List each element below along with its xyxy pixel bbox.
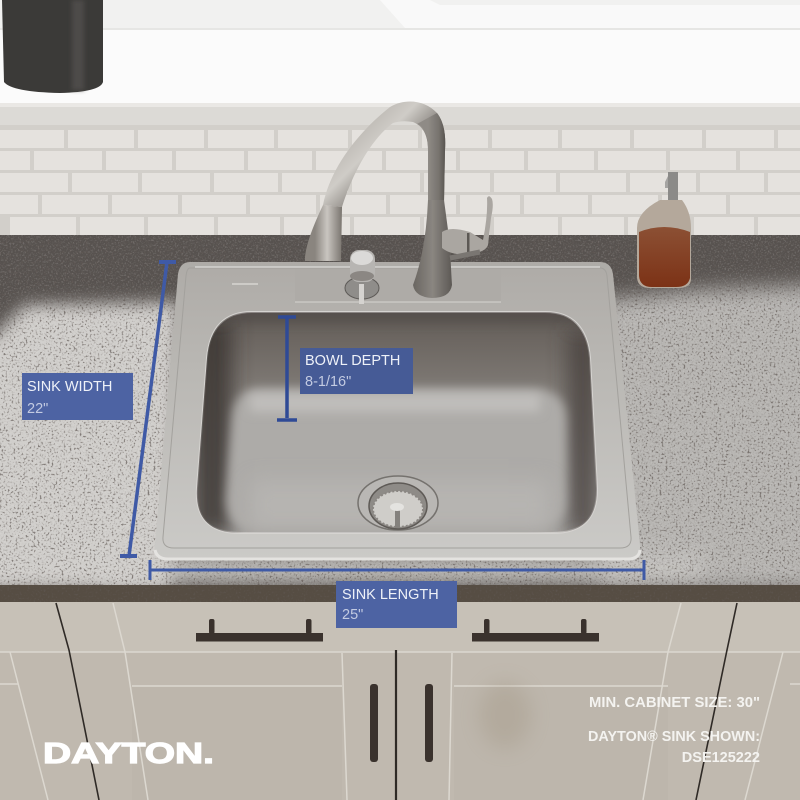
cabinet size note <box>588 695 760 766</box>
faucet body <box>413 200 452 298</box>
spout arc <box>323 101 445 207</box>
lever handle <box>442 196 493 254</box>
label: sink length: 25" <box>342 607 363 623</box>
cabinet size note: DAYTON® SINK SHOWN: <box>588 729 760 745</box>
label: bowl depth: BOWL DEPTH <box>305 353 400 369</box>
soap bottle <box>637 172 691 288</box>
faucet neck shading <box>417 113 445 202</box>
label: sink length <box>336 581 457 628</box>
cabinet size note: MIN. CABINET SIZE: 30" <box>589 695 760 711</box>
window sill background <box>0 0 800 104</box>
dimension: sink length <box>150 560 644 628</box>
width measure line <box>120 262 176 556</box>
plant pot <box>2 0 103 93</box>
sink bowl <box>197 312 597 533</box>
door handle left <box>370 684 378 762</box>
faucet deck plate <box>295 269 501 302</box>
length measure line <box>150 560 644 580</box>
drawer pull right <box>472 619 599 642</box>
granite countertop <box>0 235 800 603</box>
drawer pull left <box>196 619 323 642</box>
label: bowl depth: 8-1/16" <box>305 374 351 390</box>
depth measure line <box>277 317 297 420</box>
brand mark on rim <box>232 283 258 285</box>
label: sink width <box>22 373 133 420</box>
label: sink width: SINK WIDTH <box>27 379 112 395</box>
sink rim <box>155 262 640 559</box>
dimension: bowl depth <box>277 317 413 420</box>
stainless sink <box>155 262 640 559</box>
label: bowl depth <box>300 348 413 394</box>
label: sink width: 22" <box>27 401 48 417</box>
cabinet drawer and door seams <box>0 603 800 800</box>
cabinet doors <box>0 602 800 800</box>
pull-down spray head <box>305 205 342 261</box>
cabinet size note: DSE125222 <box>682 750 760 766</box>
kitchen faucet <box>305 101 493 298</box>
label: sink length: SINK LENGTH <box>342 587 439 603</box>
brand logo: DAYTON. <box>43 738 214 770</box>
soap dispenser <box>345 250 379 304</box>
drain strainer <box>358 476 438 530</box>
door handle right <box>425 684 433 762</box>
dimension: sink width <box>22 262 176 556</box>
backsplash tile wall <box>0 103 800 237</box>
